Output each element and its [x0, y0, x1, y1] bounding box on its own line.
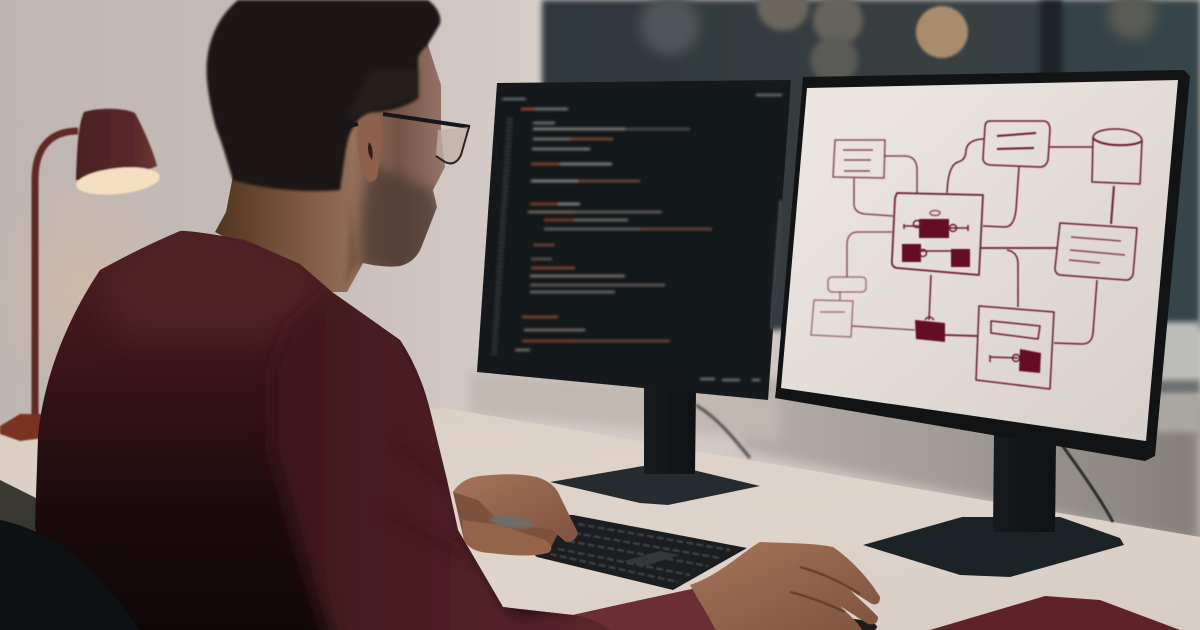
neck and face [215, 42, 445, 292]
lit sleeve [272, 285, 730, 630]
connectors [840, 139, 1114, 344]
sweater body [30, 225, 730, 630]
cable right [1062, 445, 1113, 522]
desk surface [0, 408, 1200, 630]
background window with bokeh [542, 0, 1200, 432]
bottom box [976, 306, 1054, 389]
lamp light [75, 164, 161, 198]
hair [207, 0, 440, 191]
lamp arm [35, 131, 78, 418]
lamp base [0, 414, 43, 441]
code lines [494, 95, 782, 380]
box: service top [983, 121, 1050, 167]
right hand [690, 542, 880, 630]
keyboard [495, 514, 747, 590]
box lower left [811, 300, 853, 337]
office chair [0, 520, 140, 630]
upper back light [116, 235, 310, 338]
code screen [484, 90, 780, 388]
red block [915, 317, 945, 342]
architecture diagram [811, 121, 1142, 389]
glasses [340, 114, 470, 163]
mouse shadow [793, 618, 877, 630]
box: notes right [1055, 223, 1137, 280]
desk front edge and shadow [0, 480, 40, 545]
cylinder database [1092, 129, 1142, 184]
person [30, 0, 880, 630]
small pill [828, 277, 866, 292]
left hand [453, 474, 578, 556]
box: notes top left [833, 140, 885, 178]
beard shading [360, 165, 440, 272]
left monitor [477, 80, 791, 400]
hair fade at sideburn [345, 70, 418, 120]
sweater [30, 225, 730, 630]
diagram screen [781, 80, 1178, 441]
lamp shade [76, 109, 157, 180]
ear [357, 114, 383, 182]
left monitor stand [550, 385, 760, 505]
jaw shadow on neck [345, 185, 358, 288]
right monitor [775, 70, 1190, 461]
keys visible between fingers [489, 513, 535, 531]
cable [696, 405, 750, 458]
central component box [892, 193, 983, 275]
lamp glow on wall [0, 170, 170, 410]
right monitor stand [863, 435, 1124, 577]
elbow folds [380, 440, 470, 560]
desk lamp [0, 109, 161, 441]
sleeve cuff [573, 588, 723, 630]
red notebook [930, 596, 1180, 630]
